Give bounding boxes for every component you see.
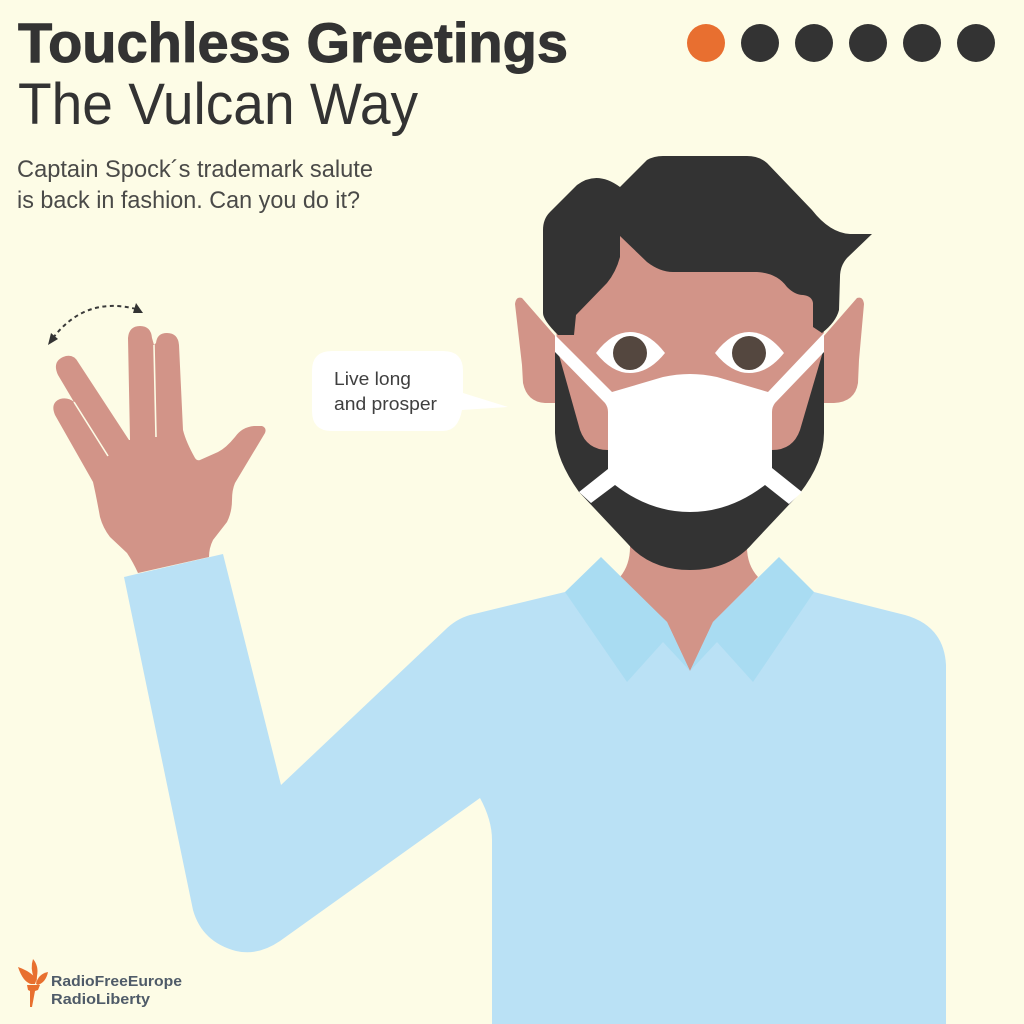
- collar: [565, 557, 814, 682]
- progress dots: [687, 24, 995, 62]
- speech bubble: Live long: [334, 369, 411, 389]
- title: [18, 11, 568, 137]
- title: The Vulcan Way: [18, 72, 418, 137]
- icon: torch: [18, 959, 48, 1007]
- eyes: [596, 332, 784, 373]
- logo: [18, 959, 182, 1008]
- subtitle text: [17, 156, 373, 214]
- beard: [555, 345, 824, 570]
- ears: [515, 298, 864, 403]
- person illustration: [124, 156, 946, 1024]
- logo: RadioFreeEurope: [51, 973, 182, 990]
- face mask: [555, 333, 824, 512]
- subtitle text: is back in fashion. Can you do it?: [17, 187, 360, 214]
- motion arrow: [48, 303, 143, 345]
- hand: [53, 326, 266, 573]
- speech bubble: [312, 351, 508, 431]
- subtitle text: Captain Spock´s trademark salute: [17, 156, 373, 183]
- speech bubble: and prosper: [334, 394, 437, 414]
- title: Touchless Greetings: [18, 11, 568, 74]
- logo: RadioLiberty: [51, 991, 151, 1008]
- face skin: [556, 230, 824, 450]
- hair: [543, 156, 872, 335]
- shirt and raised arm: [124, 554, 946, 1024]
- neck: [620, 530, 758, 671]
